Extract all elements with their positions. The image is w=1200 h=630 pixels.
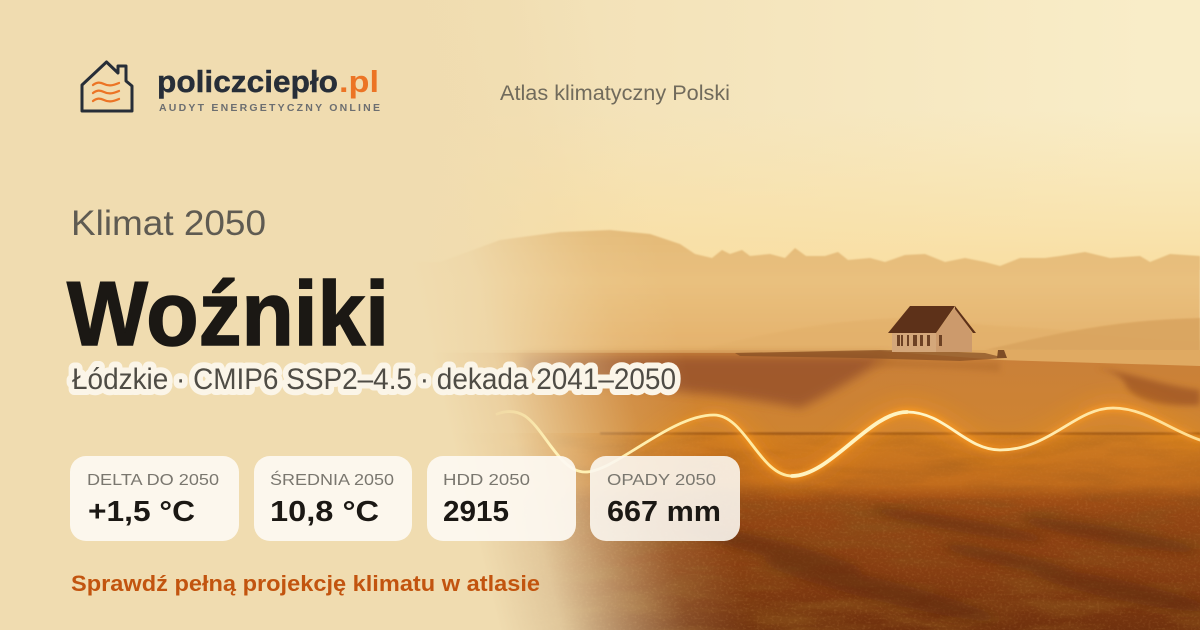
stat card: average xyxy=(254,456,412,541)
stat card: HDD: HDD 2050 xyxy=(443,472,530,489)
stat card: rainfall: 667 mm xyxy=(607,496,721,528)
stat card: HDD xyxy=(427,456,576,541)
title: Woźniki xyxy=(67,264,389,365)
tagline: AUDYT ENERGETYCZNY ONLINE xyxy=(159,102,380,114)
background landscape xyxy=(461,0,1200,630)
logo xyxy=(82,62,380,114)
atlas label: Atlas klimatyczny Polski xyxy=(500,82,730,105)
stat card: delta: +1,5 °C xyxy=(88,496,195,528)
brand name: policzciepło xyxy=(157,64,338,99)
brand domain: .pl xyxy=(339,64,379,99)
stat card: HDD: 2915 xyxy=(443,496,509,528)
eyebrow: Klimat 2050: Klimat 2050 xyxy=(71,204,266,243)
stat card: rainfall xyxy=(590,456,740,541)
stat card: average: 10,8 °C xyxy=(270,496,379,528)
dark crop rows xyxy=(676,502,1200,630)
stat card: rainfall: OPADY 2050 xyxy=(607,472,716,489)
subtitle with halo: Łódzkie · CMIP6 SSP2–4.5 · dekada 2041–2050 xyxy=(72,363,676,396)
house on hill xyxy=(735,306,1007,361)
stat card: delta: DELTA DO 2050 xyxy=(87,472,219,489)
subtitle with halo: Łódzkie · CMIP6 SSP2–4.5 · dekada 2041–2050 xyxy=(72,363,676,396)
icon: house with heat waves xyxy=(82,62,132,111)
stat card: average: ŚREDNIA 2050 xyxy=(270,470,394,489)
glowing temperature wave xyxy=(497,408,1200,476)
dune shadow xyxy=(520,356,890,408)
stat card: delta xyxy=(70,456,239,541)
call to action: Sprawdź pełną projekcję klimatu w atlasie xyxy=(71,571,540,596)
